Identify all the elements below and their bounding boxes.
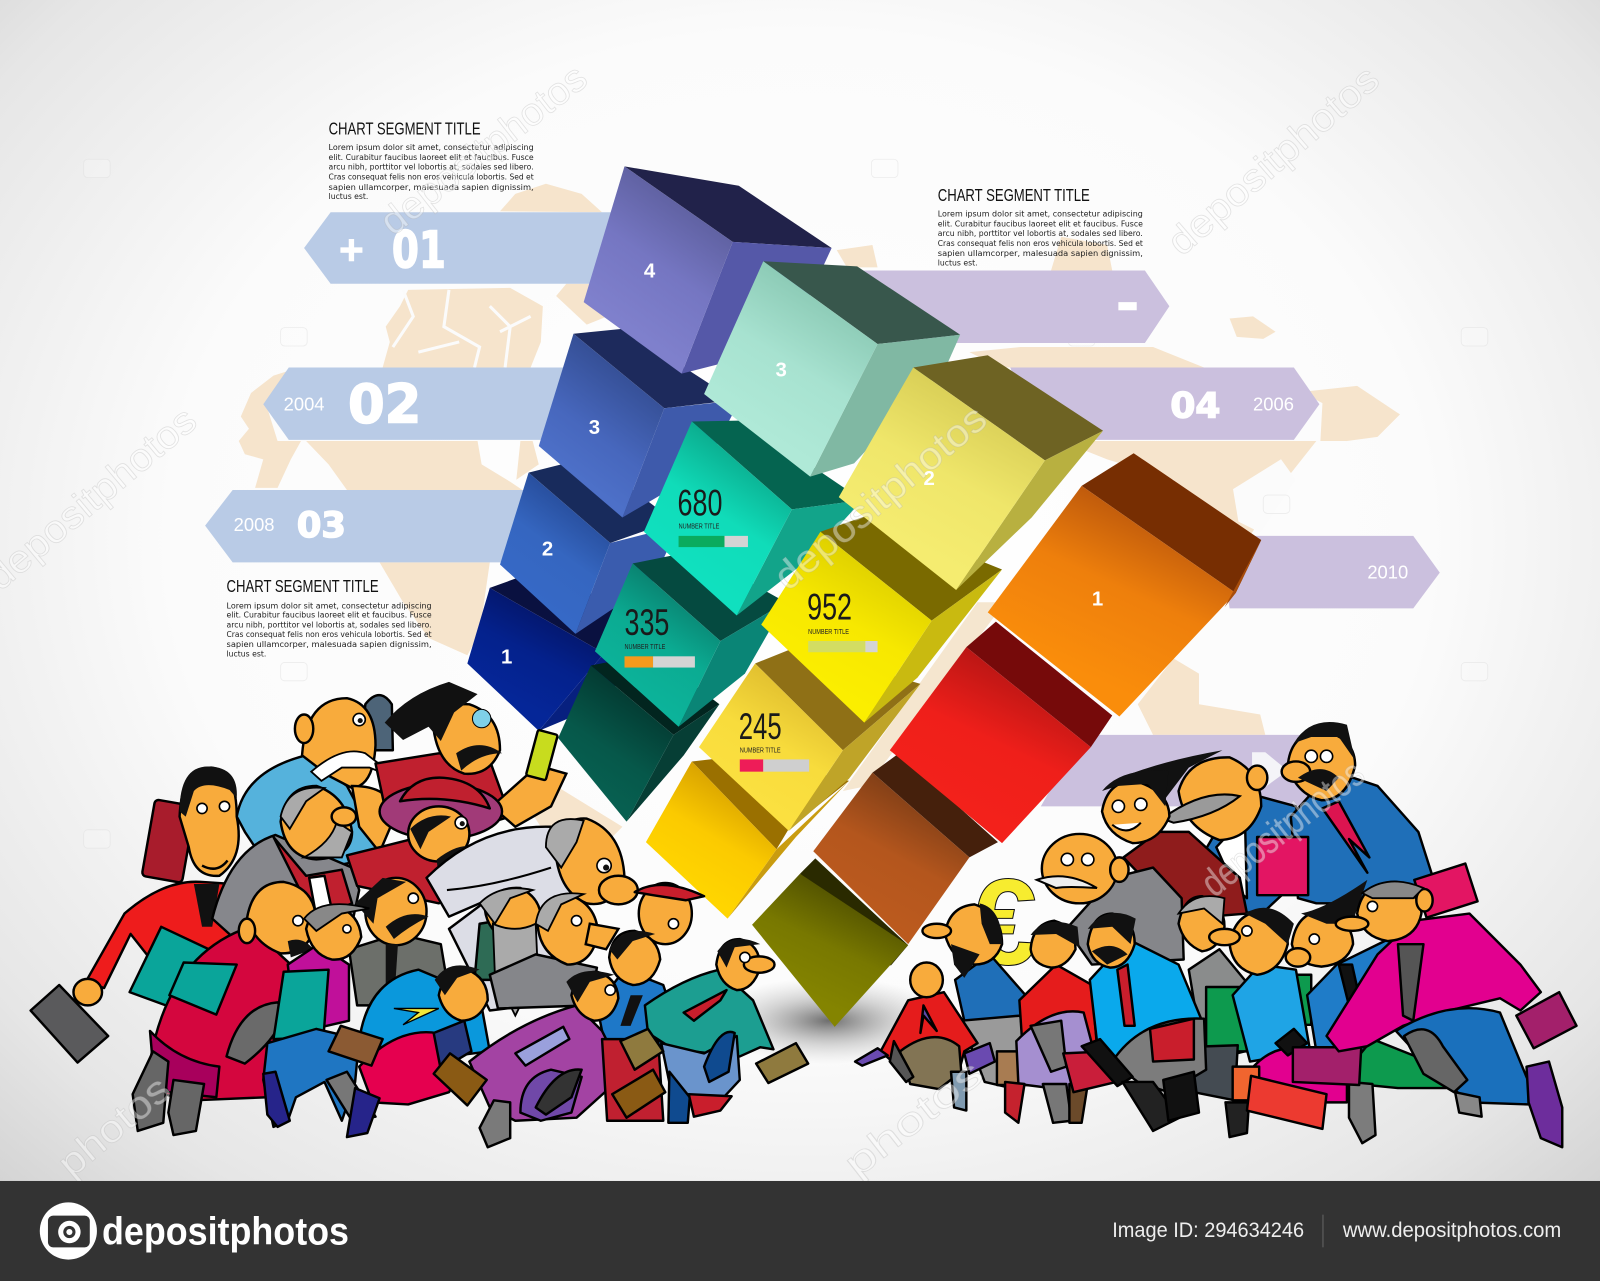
figure: small red man [855, 963, 995, 1111]
figure: small blue man [597, 931, 682, 1056]
cube yellow 952: 952 [807, 587, 852, 628]
figure: long-haired man dark red [1102, 770, 1247, 919]
left arrow banners [205, 212, 622, 562]
banner minus [857, 270, 1169, 343]
figure: grey hair man in grey suit [490, 893, 618, 1008]
banner 2010 [1219, 536, 1440, 608]
section text: chart segment 1: CHART SEGMENT TITLE [329, 119, 481, 139]
section text: chart segment 3: CHART SEGMENT TITLE [227, 576, 379, 596]
cube orange 1 [988, 453, 1261, 717]
cube navy 1 [467, 568, 653, 731]
case: tan [997, 1051, 1041, 1085]
cube yellow 2 [839, 355, 1103, 590]
cube yellow 2: 2 [923, 468, 935, 490]
depositphotos watermarks: depositphotos [766, 397, 995, 599]
figure: glasses man with phone [376, 682, 566, 832]
banner 04: 04 [1170, 386, 1220, 426]
figure: light blue man [1209, 908, 1310, 1062]
column: teal [558, 261, 960, 822]
cube yellow 245: 245 [739, 706, 782, 747]
banner 01 [304, 212, 622, 284]
cartoon crowd: left group [31, 682, 808, 1147]
cube yellow 245 [699, 647, 920, 831]
banner lower [1041, 735, 1316, 806]
cube purple 4: 4 [644, 261, 656, 283]
section text: chart segment 1: arcu nibh, porttitor vel lobortis at, sodales sed libero. [329, 162, 534, 171]
banner 01: + [338, 230, 365, 268]
figure: top man in blue [1282, 722, 1478, 918]
floor shadow under chart [706, 978, 951, 1064]
section text: chart segment 2: Cras consequat felis non eros vehicula lobortis. Sed et [938, 239, 1143, 248]
depositphotos watermarks: photos [836, 1052, 991, 1186]
figure: small grey-haired man in magenta [273, 904, 369, 1039]
figure: man in bright blue [1082, 913, 1206, 1131]
folder: teal back [130, 927, 231, 1016]
section text: chart segment 3: elit. Curabitur faucibus laoreet elit et faucibus. Fusce [227, 611, 432, 620]
site url: www.depositphotos.com [1342, 1218, 1561, 1242]
cream strip beside red column [843, 602, 1005, 791]
figure: bald mustache man grey suit [1037, 834, 1184, 965]
logo wordmark: depositphotos [102, 1210, 349, 1253]
depositphotos watermarks: depositphotos [1193, 752, 1373, 905]
cube teal 680: NUMBER TITLE [679, 523, 720, 531]
folder: pink [1257, 837, 1308, 895]
cube blue 2: 2 [542, 538, 553, 560]
figure: crimson bald man [133, 882, 316, 1135]
group: legs and cases [1226, 1029, 1446, 1143]
column: orange to olive [752, 453, 1261, 1027]
section text: chart segment 1: sapien ullamcorper, malesuada sapien dignissim, [329, 183, 534, 192]
cube mint 3 [704, 261, 960, 477]
cube teal 335: NUMBER TITLE [624, 643, 665, 651]
figure: red hat man [347, 778, 502, 903]
figure: red cap man [635, 883, 704, 944]
banner 04: 2006 [1253, 393, 1294, 414]
banner 03: 03 [297, 506, 346, 546]
banner 03: 2008 [234, 514, 275, 535]
section text: chart segment 1 [329, 119, 534, 201]
cube gold [646, 755, 849, 919]
cube teal 680 [644, 421, 862, 615]
section text: chart segment 1: luctus est. [329, 192, 368, 201]
figure: purple man [434, 971, 628, 1147]
banner 04 [1010, 367, 1319, 440]
figure: white beard man [449, 888, 573, 1016]
depositphotos watermarks: photos [50, 1068, 179, 1186]
section text: chart segment 3: arcu nibh, porttitor vel lobortis at, sodales sed libero. [227, 621, 432, 630]
cube yellow 245: NUMBER TITLE [740, 746, 781, 754]
section text: chart segment 2: arcu nibh, porttitor vel lobortis at, sodales sed libero. [938, 229, 1143, 238]
world map [239, 184, 1400, 847]
column: yellow [646, 355, 1103, 919]
3D bar chart [467, 166, 1261, 1027]
banner 02: 02 [348, 374, 421, 436]
section text: chart segment 3 [227, 576, 432, 658]
figure: teal man with briefcases [602, 939, 808, 1123]
cube blue 3: 3 [589, 417, 600, 439]
section text: chart segment 3: Lorem ipsum dolor sit amet, consectetur adipiscing [227, 601, 432, 610]
cube dark green [558, 653, 719, 822]
figure: grey suit man [212, 786, 359, 937]
case: red lower [1063, 1051, 1116, 1092]
section text: chart segment 2: Lorem ipsum dolor sit amet, consectetur adipiscing [938, 209, 1143, 218]
section text: chart segment 3: sapien ullamcorper, malesuada sapien dignissim, [227, 640, 432, 649]
depositphotos watermarks: depositphotos [1159, 57, 1388, 264]
figure: man in red sweater [1005, 921, 1097, 1123]
cartoon crowd: right group [855, 722, 1577, 1147]
figure: grey shirt mustache man [349, 878, 451, 1005]
figure: grey-haired man with green folder [1179, 896, 1253, 1100]
banner 03 [205, 490, 531, 562]
cube olive [752, 858, 908, 1027]
cube red [890, 622, 1112, 843]
depositphotos watermarks [0, 56, 1388, 1186]
section text: chart segment 2: CHART SEGMENT TITLE [938, 185, 1090, 205]
image id: Image ID: 294634246 [1112, 1218, 1304, 1242]
cube blue 3 [539, 329, 740, 518]
section text: chart segment 2: luctus est. [938, 258, 978, 267]
column: blue [467, 166, 832, 731]
cube orange 1: 1 [1092, 588, 1103, 610]
cube teal 335: 335 [624, 602, 669, 643]
depositphotos watermarks: depositphotos [372, 56, 595, 244]
map gaps [393, 290, 1294, 531]
cube blue 2 [500, 457, 679, 634]
figure: old man in white coat [427, 819, 638, 924]
section text: chart segment 3: luctus est. [227, 649, 266, 658]
right arrow banners [857, 270, 1440, 806]
section text: chart segment 2 [938, 185, 1143, 267]
figure: mustached man in blue sweater [922, 903, 1031, 1090]
cube purple 4 [584, 166, 832, 374]
banner 2010: 2010 [1367, 562, 1408, 583]
figure: magenta suit man [1327, 881, 1577, 1147]
cube yellow 952: NUMBER TITLE [808, 628, 849, 636]
faint camera watermark icons [84, 159, 1488, 848]
figure: bald grey mustache man [1120, 750, 1311, 914]
figure: blue suit man [1286, 880, 1398, 1067]
figure: old man in light blue [237, 695, 400, 878]
section text: chart segment 1: elit. Curabitur faucibus laoreet elit et faucibus. Fusce [329, 153, 534, 162]
footer banner [0, 1181, 1600, 1281]
figure: green folder back [1279, 975, 1311, 1025]
briefcase brown [329, 1026, 383, 1066]
cube navy 1: 1 [501, 646, 512, 668]
section text: chart segment 3: Cras consequat felis non eros vehicula lobortis. Sed et [227, 630, 432, 639]
cube yellow 952 [761, 515, 1002, 723]
banner 02: 2004 [284, 393, 325, 414]
cube teal 335 [595, 551, 786, 727]
banner 02 [263, 367, 571, 440]
section text: chart segment 2: sapien ullamcorper, malesuada sapien dignissim, [938, 249, 1143, 258]
figure: blue man with yellow tie [263, 965, 490, 1137]
section text: chart segment 1: Lorem ipsum dolor sit amet, consectetur adipiscing [329, 143, 534, 152]
icon: euro sign: € [969, 854, 1037, 991]
cube brown [813, 753, 998, 944]
cube teal 680: 680 [678, 482, 722, 523]
banner 01: 01 [392, 221, 446, 280]
figure: man in red suit with grey case [31, 767, 241, 1063]
section text: chart segment 1: Cras consequat felis non eros vehicula lobortis. Sed et [329, 173, 534, 182]
icon: camera logo [40, 1202, 97, 1260]
section text: chart segment 2: elit. Curabitur faucibus laoreet elit et faucibus. Fusce [938, 220, 1143, 229]
cube mint 3: 3 [776, 360, 787, 382]
